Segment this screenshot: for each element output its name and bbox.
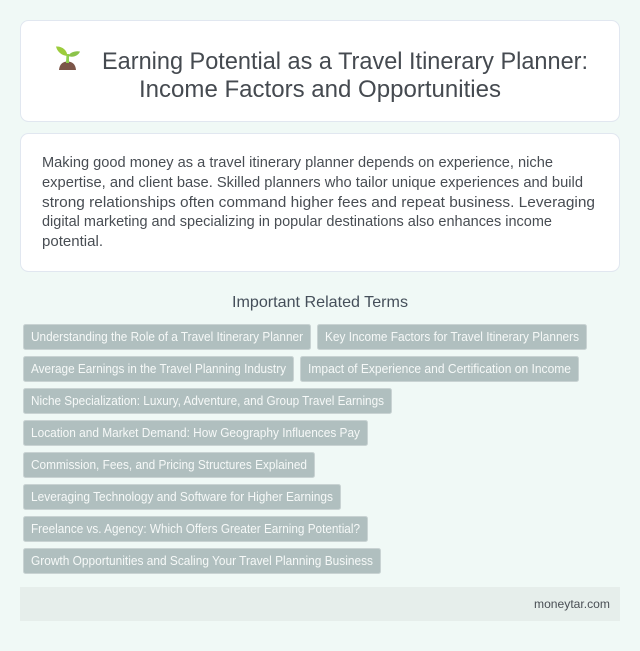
tag bbox=[24, 356, 294, 382]
term tags bbox=[24, 324, 586, 574]
tag bbox=[24, 484, 340, 510]
tag: Commission, Fees, and Pricing Structures Explained bbox=[31, 458, 307, 472]
summary paragraph: Making good money as a travel itinerary planner depends on experience, niche bbox=[42, 154, 553, 171]
tag bbox=[24, 420, 368, 446]
title text bbox=[102, 48, 588, 103]
tag: Key Income Factors for Travel Itinerary Planners bbox=[325, 330, 579, 344]
tag bbox=[300, 356, 578, 382]
footer source: moneytar.com bbox=[534, 597, 610, 611]
summary paragraph bbox=[42, 154, 595, 250]
tag bbox=[24, 452, 314, 478]
tag: Freelance vs. Agency: Which Offers Greater Earning Potential? bbox=[31, 522, 360, 536]
tag: Leveraging Technology and Software for Higher Earnings bbox=[31, 490, 333, 504]
tag: Location and Market Demand: How Geography Influences Pay bbox=[31, 426, 361, 440]
summary paragraph: potential. bbox=[42, 233, 103, 250]
tag: Growth Opportunities and Scaling Your Travel Planning Business bbox=[31, 554, 373, 568]
tag bbox=[24, 516, 368, 542]
tag bbox=[318, 324, 586, 350]
tag bbox=[24, 388, 392, 414]
summary paragraph: digital marketing and specializing in popular destinations also enhances income bbox=[42, 213, 552, 230]
summary card bbox=[20, 134, 620, 272]
tag: Average Earnings in the Travel Planning Industry bbox=[31, 362, 287, 376]
heading: important related terms: Important Related Terms bbox=[232, 294, 408, 311]
footer bar bbox=[20, 587, 620, 621]
title card bbox=[20, 20, 620, 122]
tag: Niche Specialization: Luxury, Adventure, and Group Travel Earnings bbox=[31, 394, 384, 408]
summary paragraph: expertise, and client base. Skilled planners who tailor unique experiences and build bbox=[42, 174, 583, 191]
tag bbox=[24, 324, 310, 350]
title text: Earning Potential as a Travel Itinerary Planner: bbox=[102, 48, 588, 75]
summary paragraph: strong relationships often command higher fees and repeat business. Leveraging bbox=[42, 194, 595, 211]
tag: Understanding the Role of a Travel Itinerary Planner bbox=[31, 330, 303, 344]
icon: seedling bbox=[56, 46, 80, 70]
tag bbox=[24, 548, 380, 574]
tag: Impact of Experience and Certification on Income bbox=[308, 362, 571, 376]
title text: Income Factors and Opportunities bbox=[139, 76, 501, 103]
